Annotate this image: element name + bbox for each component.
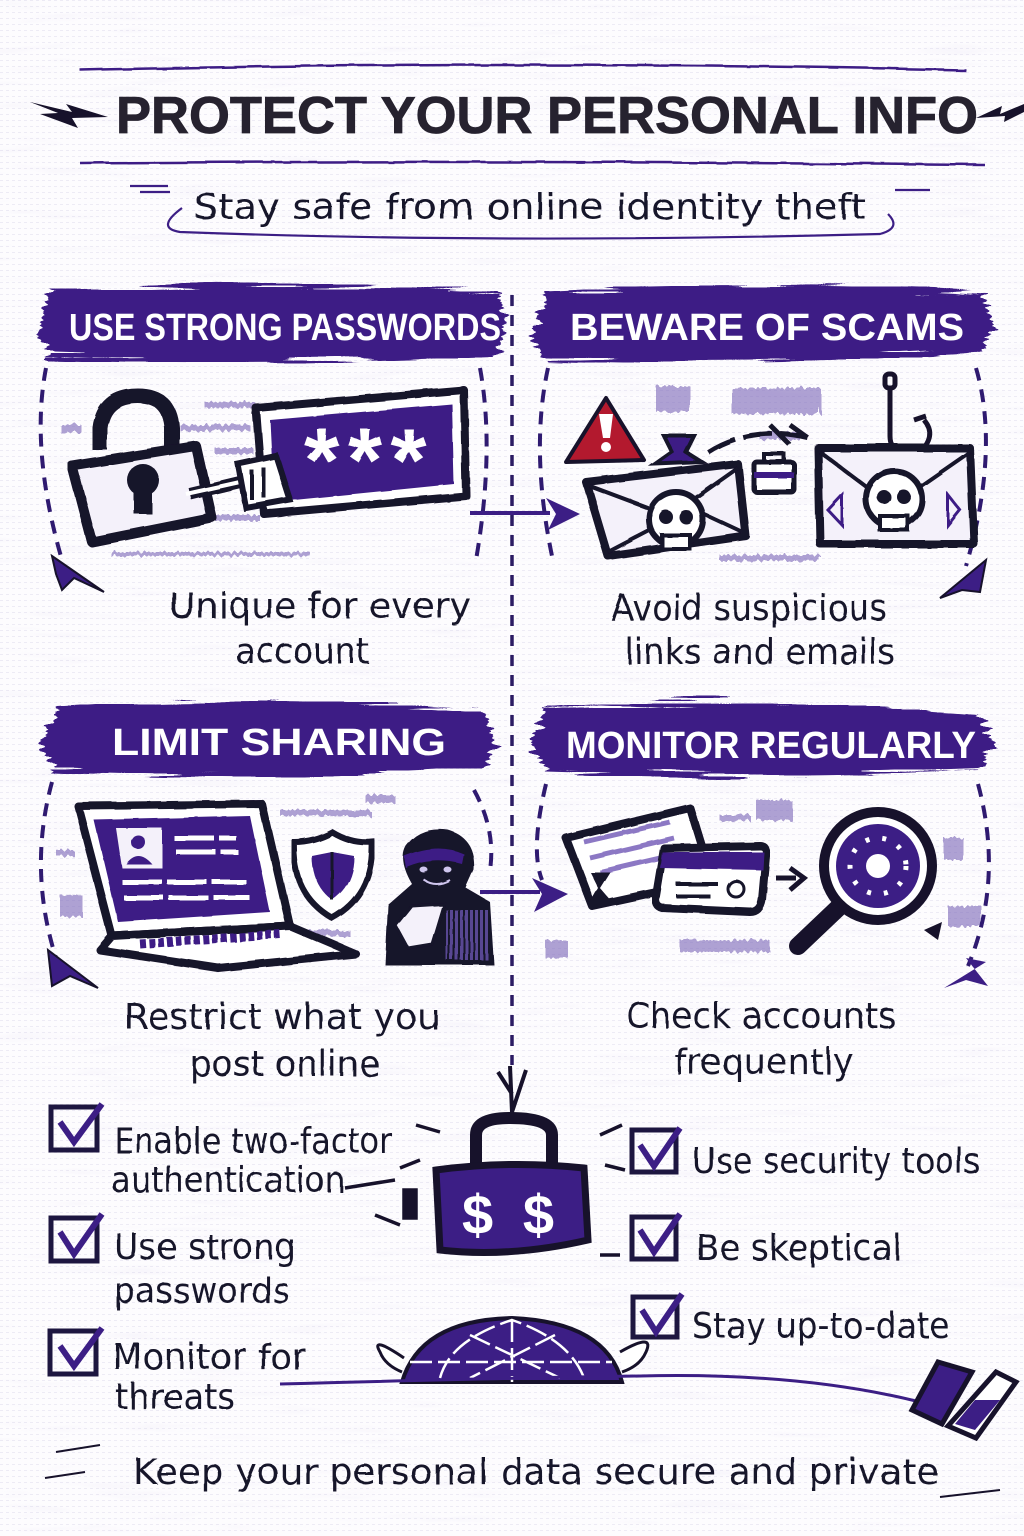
banner bbox=[42, 701, 496, 776]
dashed arc arrows bbox=[41, 368, 487, 560]
checklist: right bbox=[632, 1128, 980, 1347]
check: security tools bbox=[632, 1128, 980, 1182]
check: strong passwords: passwords bbox=[114, 1271, 290, 1312]
banner bbox=[38, 285, 506, 361]
icon: id document bbox=[566, 808, 712, 906]
icon: money padlock: $$ bbox=[462, 1183, 554, 1246]
caption: Check accounts bbox=[626, 996, 896, 1037]
arrow: passwords to scams bbox=[470, 498, 580, 530]
header rules bbox=[80, 65, 985, 165]
icon: money padlock bbox=[345, 1066, 625, 1255]
decorative data marks bbox=[56, 795, 395, 936]
icon: hook bbox=[885, 374, 930, 454]
check: monitor threats: threats bbox=[115, 1377, 235, 1418]
icon: password field bbox=[256, 390, 466, 514]
icon: small arrow and case bbox=[708, 425, 808, 492]
caption: Avoid suspicious bbox=[611, 588, 887, 629]
panel: use strong passwords bbox=[38, 285, 506, 672]
check: two-factor bbox=[51, 1104, 392, 1201]
icon: padlock bbox=[72, 396, 212, 542]
icon: skull envelope left bbox=[586, 436, 746, 556]
decorative data marks bbox=[656, 386, 820, 561]
banner bbox=[532, 286, 994, 361]
icon: shield bbox=[294, 832, 372, 918]
check: security tools: Use security tools bbox=[692, 1141, 980, 1182]
panel: beware of scams bbox=[532, 286, 994, 673]
panel: monitor regularly bbox=[532, 702, 994, 1083]
icon: password field: *** bbox=[304, 411, 426, 511]
check: two-factor: authentication bbox=[111, 1160, 345, 1201]
check: monitor threats: Monitor for bbox=[112, 1337, 306, 1378]
subtitle swoosh bbox=[130, 186, 930, 239]
check: skeptical bbox=[632, 1214, 902, 1269]
icon: hooded hacker bbox=[385, 829, 494, 965]
caption: Unique for every bbox=[169, 586, 471, 627]
check: monitor threats bbox=[50, 1328, 306, 1418]
dashed arc arrows bbox=[41, 782, 491, 958]
subtitle: Stay safe from online identity theft bbox=[194, 187, 866, 228]
icon: laptop bbox=[78, 804, 356, 968]
dashed arc arrows bbox=[537, 784, 989, 966]
check: two-factor: Enable two-factor bbox=[114, 1121, 392, 1162]
heading: USE STRONG PASSWORDS bbox=[69, 307, 501, 349]
heading: MONITOR REGULARLY bbox=[566, 725, 976, 767]
heading: BEWARE OF SCAMS bbox=[570, 307, 964, 349]
icon: right lightning bbox=[976, 104, 1024, 122]
panel: limit sharing bbox=[41, 701, 496, 1085]
icon: usb drives bbox=[912, 1362, 1016, 1438]
caption: post online bbox=[190, 1044, 380, 1085]
check: strong passwords bbox=[51, 1214, 296, 1312]
footer text: Keep your personal data secure and private bbox=[133, 1452, 939, 1493]
icon: key connector bbox=[186, 456, 290, 508]
icon: globe bbox=[280, 1318, 920, 1402]
icon: credit card bbox=[656, 846, 766, 912]
check: strong passwords: Use strong bbox=[114, 1227, 296, 1268]
title: PROTECT YOUR PERSONAL INFO bbox=[116, 87, 978, 145]
icon: magnifier bbox=[798, 812, 942, 946]
check: skeptical: Be skeptical bbox=[696, 1228, 902, 1269]
caption: account bbox=[235, 631, 369, 672]
checklist: left bbox=[50, 1104, 392, 1418]
dashed arc arrows bbox=[540, 368, 986, 566]
banner bbox=[532, 702, 994, 776]
caption: links and emails bbox=[625, 632, 895, 673]
decorative data marks bbox=[60, 402, 310, 556]
icon: skull envelope right bbox=[818, 448, 974, 544]
caption: Restrict what you bbox=[124, 997, 440, 1038]
heading: LIMIT SHARING bbox=[112, 722, 446, 764]
center dashed divider bbox=[510, 295, 514, 1065]
footer swash bbox=[45, 1445, 1000, 1497]
check: up-to-date: Stay up-to-date bbox=[692, 1306, 950, 1347]
arrow: sharing to monitor bbox=[480, 878, 568, 912]
icon: warning triangle bbox=[566, 398, 644, 462]
check: up-to-date bbox=[633, 1294, 950, 1347]
caption: frequently bbox=[674, 1042, 854, 1083]
decorative data marks bbox=[545, 800, 982, 958]
icon: small arrow bbox=[776, 868, 804, 890]
icon: left lightning bbox=[30, 102, 108, 128]
